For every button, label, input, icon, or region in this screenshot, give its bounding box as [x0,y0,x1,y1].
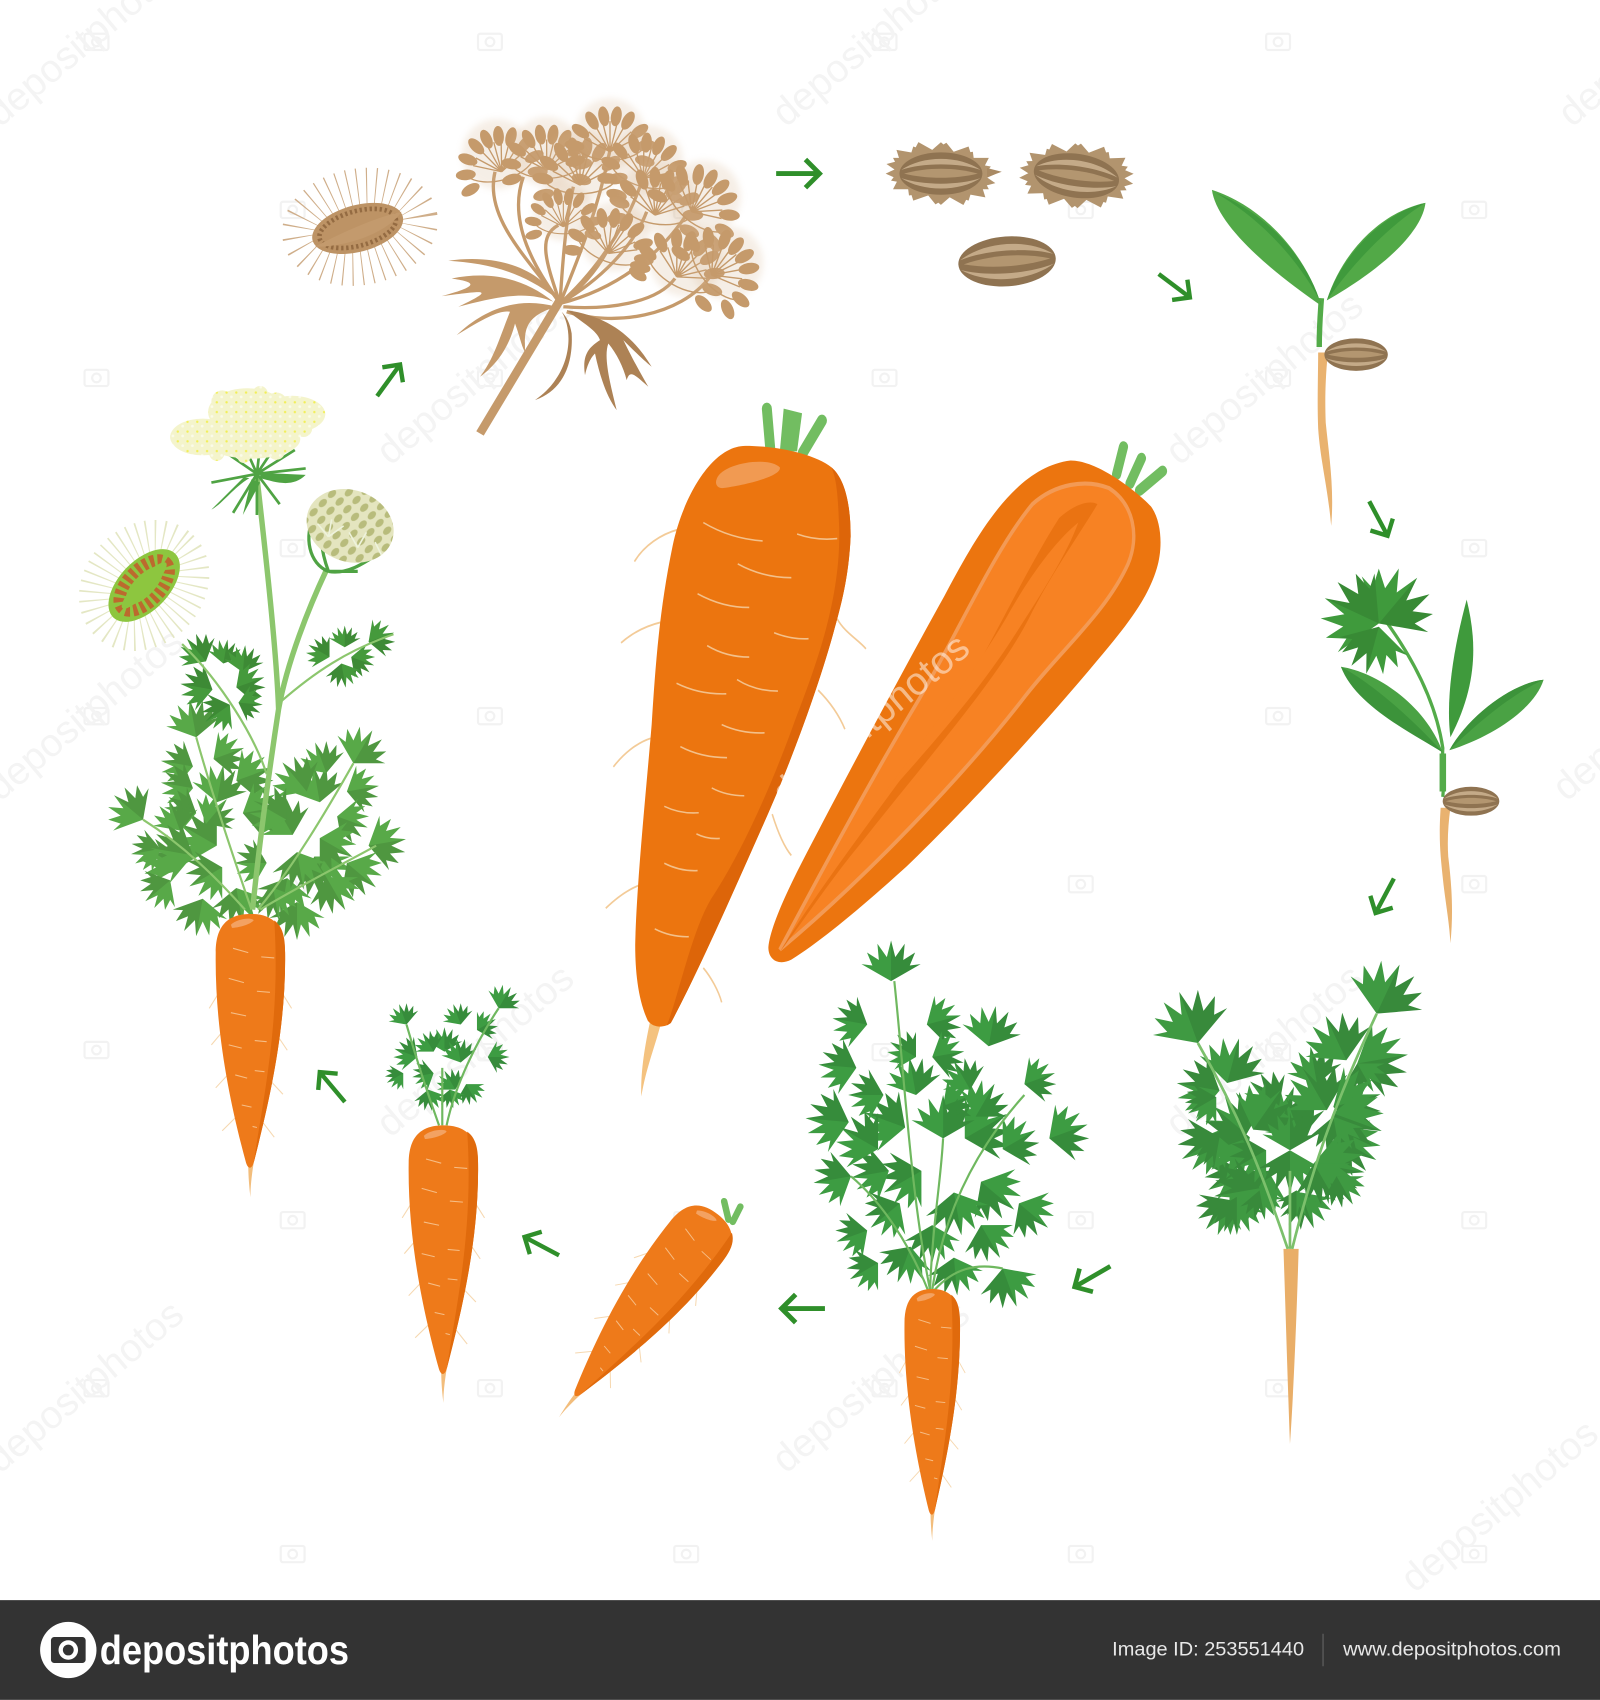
cut carrot cross-section [768,447,1163,962]
watermark pattern: depositphotos [368,956,582,1145]
seed-forming umbel [296,477,404,575]
seedling stage [1212,190,1425,526]
carrot with small sprig [380,978,526,1403]
flowering plant [96,386,411,1197]
watermark pattern: depositphotos [1158,956,1371,1145]
watermark pattern: depositphotos [368,284,582,473]
flower cross-section [78,519,210,652]
spiky seed left [881,133,1002,214]
angled carrot [528,1190,748,1441]
cycle arrows [310,159,1405,1323]
leafy plant with small carrot [803,941,1098,1541]
young leafy plant with thin root [1142,948,1435,1444]
spiky seed right [1009,126,1144,226]
two-leaf seedling with first true leaf [1306,550,1544,943]
footer logo: depositphotos [100,1627,349,1673]
watermark pattern: depositphotos [764,1292,978,1481]
footer logo [40,1622,349,1678]
white flower umbel [170,386,325,463]
watermark pattern: depositphotos [1158,284,1371,473]
watermark over cut carrot: depositphotos [764,626,978,815]
footer bar [0,1600,1600,1700]
dried brown seed umbel [442,98,786,433]
website: www.depositphotos.com [1342,1638,1561,1660]
plain seed [957,233,1057,290]
seed with hairs [296,179,424,275]
large whole carrot [606,409,866,1097]
image id: Image ID: 253551440 [1112,1638,1304,1660]
